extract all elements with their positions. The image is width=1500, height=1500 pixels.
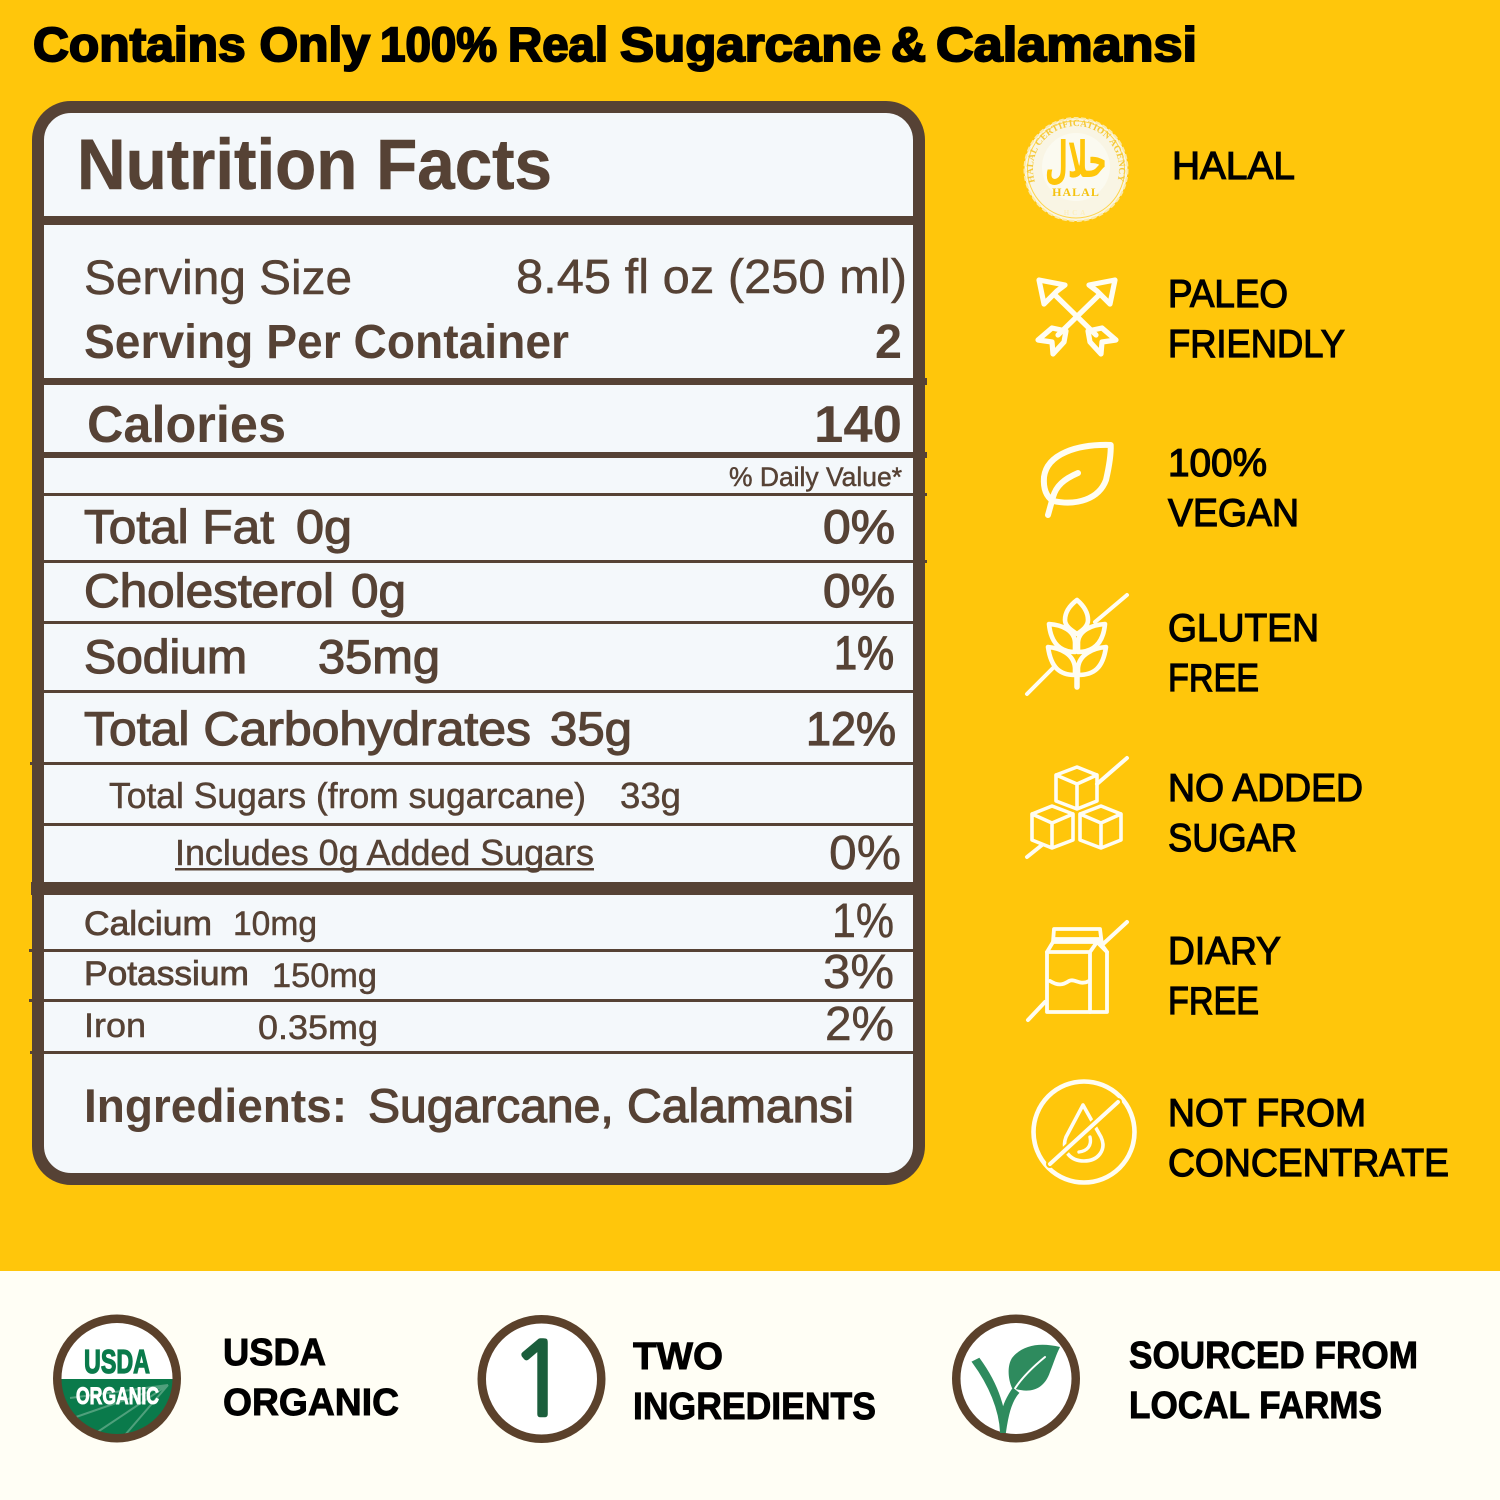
row: total sugars: Total Sugars (from sugarcane)	[109, 775, 586, 816]
label: 100% vegan: 100%	[1168, 442, 1267, 485]
label: two ingredients: INGREDIENTS	[633, 1386, 876, 1428]
row: sodium: Sodium	[84, 630, 247, 683]
label: halal: HALAL	[1172, 145, 1295, 188]
row: potassium: Potassium	[84, 955, 249, 993]
row: total fat: Total Fat	[84, 500, 274, 553]
row: cholesterol: 0%	[823, 564, 895, 617]
daily value header: % Daily Value*	[729, 462, 902, 492]
label: sourced from local farms: LOCAL FARMS	[1129, 1385, 1382, 1427]
bottom band	[0, 1271, 1500, 1500]
row: potassium: 150mg	[272, 957, 377, 995]
label: no added sugar: SUGAR	[1168, 817, 1297, 860]
ingredients: Ingredients:	[84, 1079, 347, 1132]
row: calories	[87, 396, 902, 454]
label: diary free: DIARY	[1168, 930, 1281, 973]
row: sodium: 35mg	[318, 630, 440, 683]
label: no added sugar	[1168, 767, 1363, 860]
icon: usda organic seal: USDA	[84, 1343, 150, 1380]
icon: halal seal: حلال	[1045, 131, 1107, 189]
label: not from concentrate	[1168, 1092, 1449, 1185]
icon: number one badge	[482, 1319, 601, 1439]
icon: usda organic seal: ORGANIC	[76, 1383, 159, 1410]
title	[33, 19, 1197, 72]
row: sodium: 1%	[834, 626, 894, 679]
row: total carbohydrates: 12%	[806, 702, 896, 755]
row: serving size: Serving Size	[84, 252, 352, 305]
row: total fat: 0%	[823, 500, 895, 553]
row: servings per container	[84, 316, 902, 369]
label: paleo friendly: PALEO	[1168, 273, 1288, 316]
row: added sugars: Includes 0g Added Sugars	[175, 832, 594, 873]
title: Contains Only	[33, 19, 370, 72]
row: calcium	[84, 895, 894, 948]
icon: not from concentrate	[1034, 1082, 1134, 1182]
row: calories: 140	[814, 396, 902, 454]
row: servings per container: 2	[875, 316, 902, 369]
row: calories: Calories	[87, 396, 286, 454]
label: usda organic: ORGANIC	[223, 1382, 399, 1424]
icon: halal seal	[1024, 117, 1128, 222]
row: added sugars	[175, 827, 901, 880]
row: potassium	[84, 946, 894, 999]
label: two ingredients: TWO	[633, 1336, 723, 1378]
row: serving size	[84, 251, 907, 305]
label: 100% vegan: VEGAN	[1168, 492, 1299, 535]
row: iron	[84, 998, 894, 1051]
title: Sugarcane	[620, 19, 881, 72]
row: calcium: Calcium	[84, 905, 212, 943]
icon: usda organic seal	[55, 1318, 180, 1444]
label: no added sugar: NO ADDED	[1168, 767, 1363, 810]
ingredients	[84, 1079, 854, 1132]
row: cholesterol	[84, 564, 895, 617]
label: two ingredients	[633, 1336, 876, 1428]
row: calcium: 1%	[832, 895, 894, 948]
row: servings per container: Serving Per Container	[84, 316, 569, 369]
row: total carbohydrates: 35g	[550, 702, 632, 755]
row: cholesterol: 0g	[351, 564, 406, 617]
row: cholesterol: Cholesterol	[84, 564, 334, 617]
heading: nutrition facts: Nutrition Facts	[77, 126, 552, 205]
row: added sugars: 0%	[829, 827, 901, 880]
label: 100% vegan	[1168, 442, 1299, 535]
row: sodium	[84, 626, 894, 683]
row: total carbohydrates: Total Carbohydrates	[84, 702, 531, 755]
label: gluten free: GLUTEN	[1168, 607, 1319, 650]
row: total carbohydrates	[84, 702, 896, 755]
icon: leaf	[1044, 445, 1111, 515]
icon: number one badge: 1	[509, 1329, 570, 1430]
row: total fat	[84, 500, 895, 553]
row: serving size: 8.45 fl oz (250 ml)	[516, 251, 907, 304]
label: not from concentrate: CONCENTRATE	[1168, 1142, 1449, 1185]
label: not from concentrate: NOT FROM	[1168, 1092, 1366, 1135]
row: total sugars: 33g	[620, 775, 681, 816]
label: usda organic	[223, 1332, 399, 1424]
row: iron: 0.35mg	[258, 1009, 378, 1047]
label: paleo friendly: FRIENDLY	[1168, 323, 1345, 366]
icon: halal seal: HALAL	[1052, 185, 1100, 199]
label: diary free: FREE	[1168, 980, 1259, 1023]
label: diary free	[1168, 930, 1281, 1023]
icon: halal seal: HCA	[1064, 209, 1088, 217]
row: potassium: 3%	[823, 946, 894, 999]
ingredients: Sugarcane, Calamansi	[368, 1079, 854, 1132]
label: sourced from local farms	[1129, 1335, 1418, 1427]
label: usda organic: USDA	[223, 1332, 326, 1374]
label: gluten free: FREE	[1168, 657, 1259, 700]
title: 100%	[380, 19, 497, 72]
row: iron: 2%	[825, 998, 894, 1051]
label: gluten free	[1168, 607, 1319, 700]
title: Real	[508, 19, 608, 72]
title: &	[891, 19, 926, 72]
icon: crossed arrows	[1038, 280, 1116, 354]
label: paleo friendly	[1168, 273, 1345, 366]
icon: gluten free wheat	[1027, 595, 1127, 694]
row: iron: Iron	[84, 1007, 146, 1045]
icon: no added sugar cubes	[1027, 758, 1127, 857]
icon: local farms sprout	[956, 1319, 1076, 1438]
icon: dairy free carton	[1028, 922, 1127, 1020]
title: Calamansi	[936, 19, 1197, 72]
icon: halal seal: HALAL CERTIFICATION AGENCY	[1026, 120, 1126, 184]
label: sourced from local farms: SOURCED FROM	[1129, 1335, 1418, 1377]
panel: nutrition facts	[29, 107, 927, 1179]
row: total fat: 0g	[296, 500, 352, 553]
row: calcium: 10mg	[233, 905, 317, 943]
